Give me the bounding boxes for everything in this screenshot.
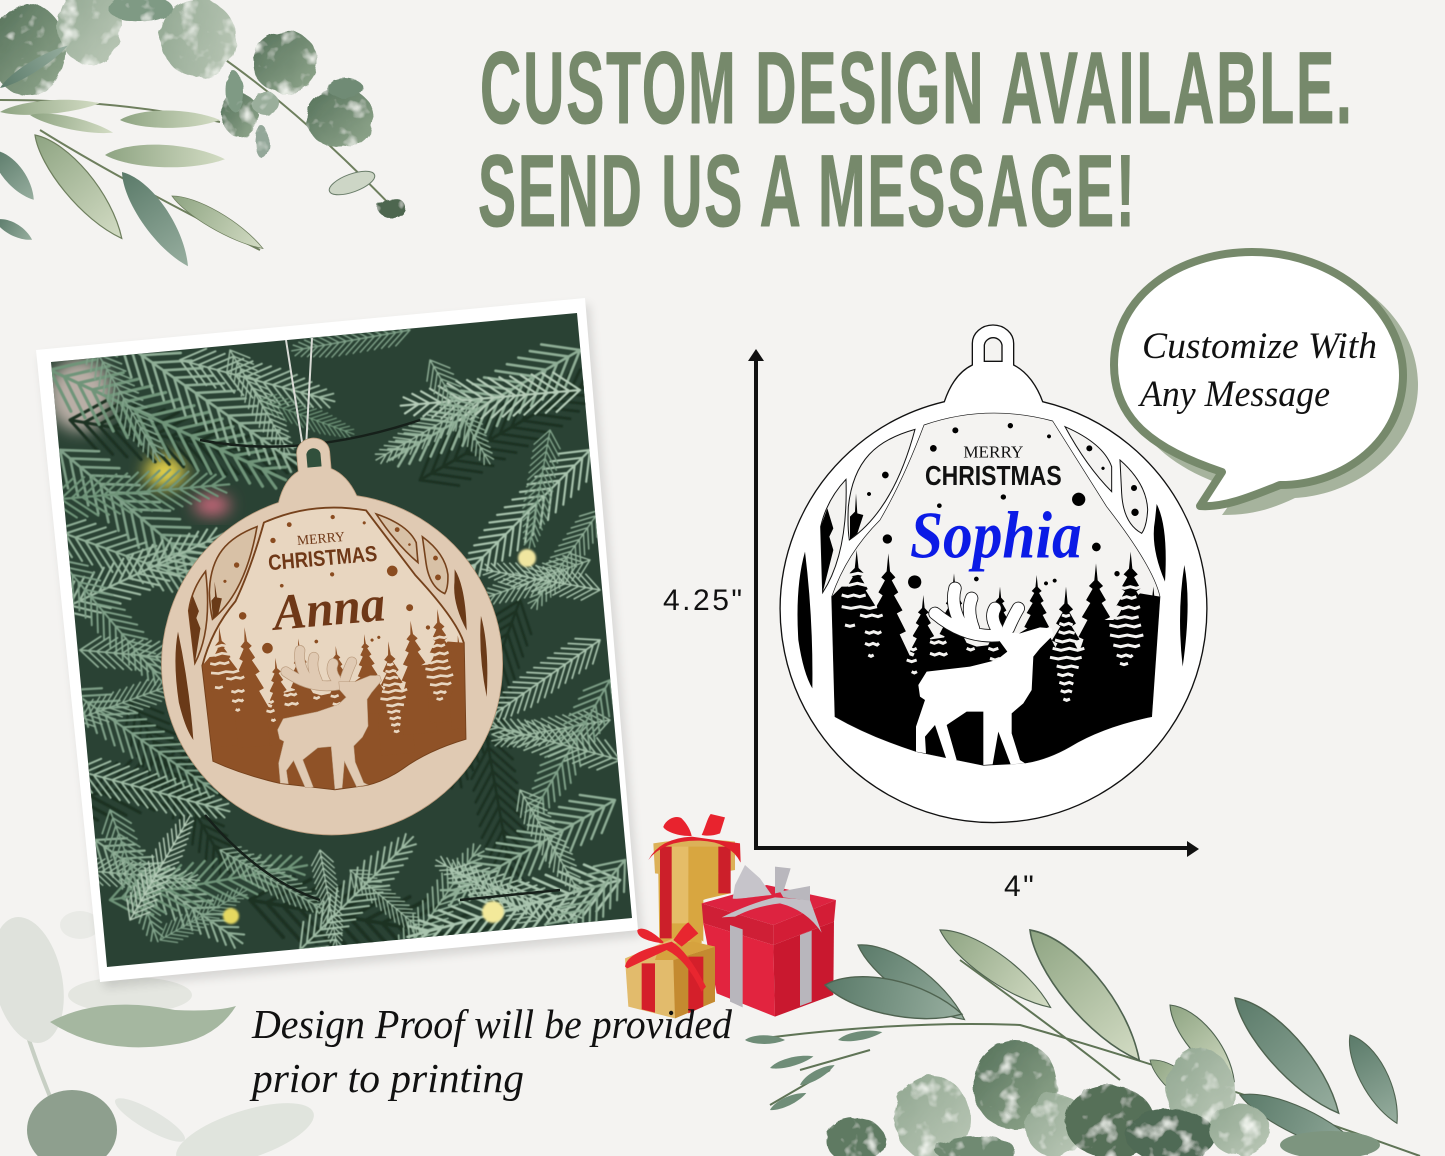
design proof note [249, 1001, 732, 1101]
ornament text: Anna [268, 575, 387, 641]
dimension arrows [748, 349, 1199, 857]
light string [200, 420, 560, 900]
width label: 4" [1004, 870, 1036, 903]
design proof note: prior to printing [249, 1055, 524, 1101]
eucalyptus leaves: bottom right [745, 916, 1420, 1156]
ornament text: merry christmas: MERRY [963, 442, 1023, 461]
gift boxes [625, 814, 836, 1018]
speech bubble [1114, 252, 1418, 515]
small gold gift [625, 922, 715, 1018]
eucalyptus leaves: top left [0, 0, 406, 273]
gold cylinder gift [648, 814, 741, 943]
ornament text: MERRY [296, 529, 345, 548]
ornament text [264, 526, 387, 641]
fir branches: dark layer [68, 368, 586, 946]
ornament text: CHRISTMAS [267, 541, 378, 575]
height label: 4.25" [663, 584, 745, 617]
fairy lights [518, 549, 536, 567]
ornament name: Sophia [910, 499, 1082, 572]
title [478, 30, 1352, 248]
eucalyptus leaves: bottom left [0, 910, 321, 1156]
ornament text: merry christmas: CHRISTMAS [925, 460, 1062, 491]
hanging string [286, 338, 312, 448]
speech bubble: Any Message [1137, 374, 1330, 415]
line-art ornament with custom name [780, 325, 1207, 823]
photo frame [30, 298, 650, 1011]
fir branches: light layer [52, 328, 626, 950]
photo: fir tree with ornament [51, 313, 632, 967]
title: CUSTOM DESIGN AVAILABLE. [480, 30, 1352, 145]
ornament text: merry christmas [925, 442, 1062, 491]
design proof note: Design Proof will be provided [251, 1001, 732, 1047]
red gift box [702, 865, 836, 1017]
wooden ornament [161, 438, 503, 836]
bubble text: Customize With [1142, 326, 1377, 367]
title: SEND US A MESSAGE! [478, 133, 1135, 248]
